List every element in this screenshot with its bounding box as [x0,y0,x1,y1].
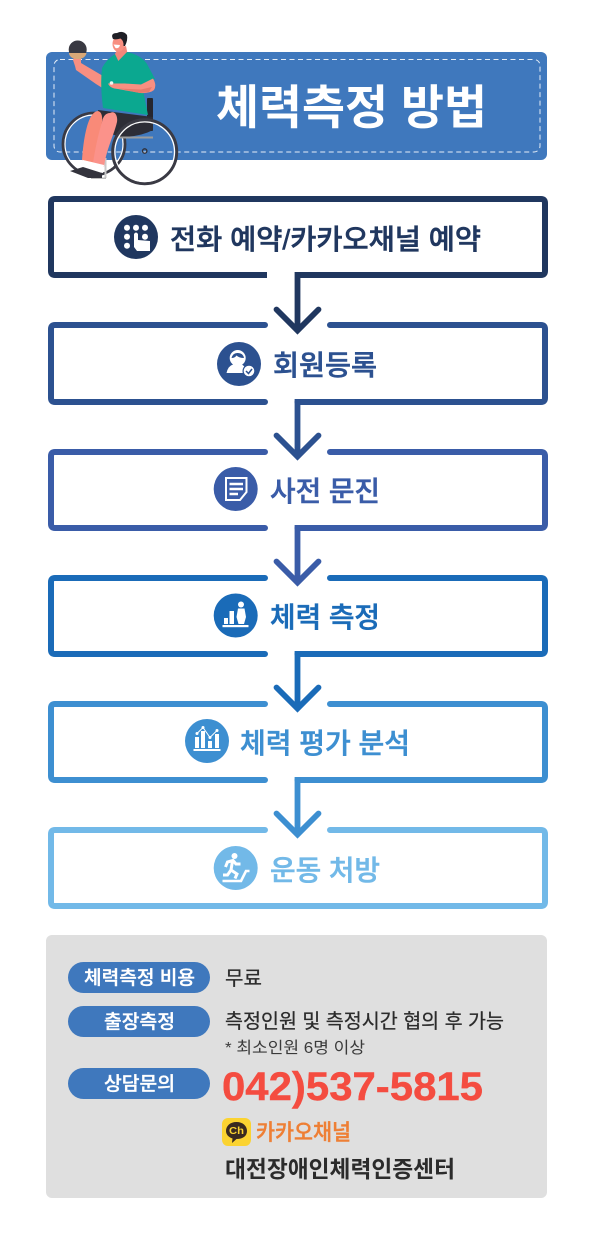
pill: cost [68,962,210,993]
icon: kakao channel [222,1118,251,1146]
outreach note: * 최소인원 6명 이상 [225,1039,365,1057]
icon: document [214,467,258,511]
arrow 2 [276,399,318,456]
step 5 label: 체력 평가 분석 [240,728,410,759]
pill: cost: 체력측정 비용 [84,967,195,989]
pill: contact [68,1068,210,1099]
illustration: wheelchair table tennis player [63,32,177,184]
cost value: 무료 [225,968,262,990]
icon: member [217,342,261,386]
icon: treadmill runner [214,846,258,890]
pill: outreach: 출장측정 [104,1011,175,1033]
pill: outreach [68,1006,210,1037]
step 3 box [51,452,545,528]
outreach value: 측정인원 및 측정시간 협의 후 가능 [225,1010,504,1033]
arrow 1 [276,272,318,330]
step 4 label: 체력 측정 [270,602,380,633]
header banner [46,52,547,160]
icon: kakao channel: Ch [229,1126,244,1137]
step 4 box [51,578,545,654]
arrow 3 [276,525,318,582]
info panel [46,935,547,1198]
step 3 label: 사전 문진 [270,476,380,507]
icon: keypad touch [114,215,158,259]
pill: contact: 상담문의 [104,1073,175,1095]
title: 체력측정 방법 [216,81,487,134]
icon: analysis chart [185,719,229,763]
phone number: 042)537-5815 [222,1065,483,1109]
step 1 box [51,199,545,275]
arrow 5 [276,777,318,834]
step 5 box [51,704,545,780]
step 1 label: 전화 예약/카카오채널 예약 [170,224,481,255]
step 2 label: 회원등록 [273,350,377,381]
arrow 4 [276,651,318,708]
step 6 box [51,830,545,906]
kakao channel label: 카카오채널 [256,1120,351,1145]
icon: fitness measurement [214,594,258,638]
step 6 label: 운동 처방 [270,855,380,886]
step 2 box [51,325,545,402]
center name: 대전장애인체력인증센터 [225,1156,455,1182]
